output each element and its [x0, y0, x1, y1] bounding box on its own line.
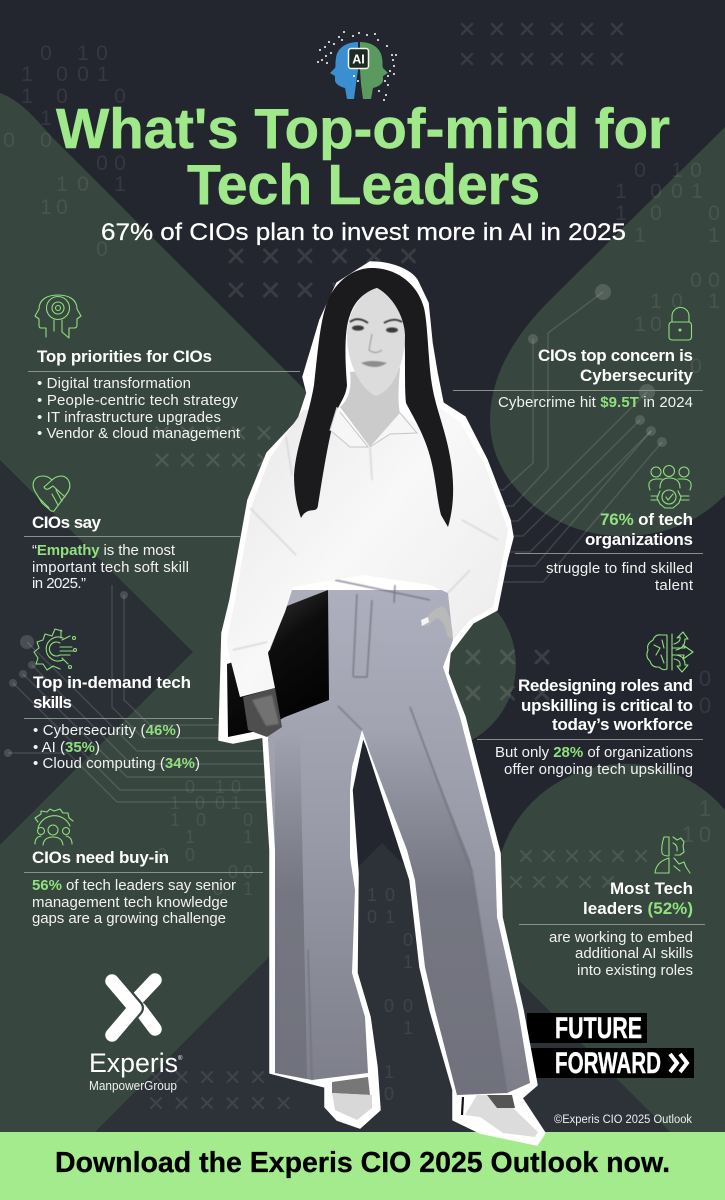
- heading: CIOs need buy-in: [32, 848, 169, 867]
- list: • AI (35%): [33, 739, 100, 756]
- background binary digits: 1: [403, 1018, 413, 1038]
- badge: Future Forward: FUTURE: [555, 1012, 642, 1045]
- body: [495, 744, 693, 778]
- heading: today’s workforce: [552, 715, 693, 734]
- panel: upskilling: [477, 632, 703, 778]
- background binary digits: 1: [699, 796, 711, 821]
- body: [546, 560, 694, 594]
- background binary digits: 10: [634, 313, 662, 336]
- panel: AI skills: [519, 837, 705, 979]
- quote: “Empathy is the most: [32, 542, 176, 559]
- body: into existing roles: [577, 962, 693, 979]
- heading: organizations: [585, 530, 693, 549]
- footer banner: [0, 1132, 725, 1200]
- background binary digits: 10: [682, 822, 711, 847]
- background binary digits: 1: [384, 1062, 394, 1082]
- logo: Experis: Experis: [89, 1048, 178, 1078]
- list: • Digital transformation: [37, 375, 191, 392]
- icon: people under gear: [35, 809, 73, 845]
- list: [33, 722, 200, 772]
- badge: Future Forward: FORWARD: [555, 1047, 661, 1080]
- heading: leaders (52%): [583, 899, 693, 918]
- title: What's Top-of-mind for: [56, 97, 670, 161]
- facial features: [350, 319, 402, 367]
- quote: important tech soft skill: [32, 559, 189, 576]
- background binary digits: 1001: [170, 793, 241, 813]
- panel: top priorities: [28, 295, 300, 442]
- heading: [538, 346, 694, 385]
- badge: Future Forward: [527, 1012, 694, 1080]
- circuit lines: [4, 284, 667, 802]
- background binary digits: 00: [3, 129, 52, 152]
- background binary digits: 00: [384, 996, 413, 1016]
- laptop: [227, 590, 329, 737]
- background binary digits: 1: [40, 107, 52, 130]
- title: Tech Leaders: [187, 153, 540, 217]
- heading: Most Tech: [610, 879, 693, 898]
- shirt: [227, 407, 508, 697]
- background binary digits: 10: [367, 885, 395, 905]
- body: Cybercrime hit $9.5T in 2024: [498, 394, 693, 411]
- person: [219, 262, 545, 1145]
- list: [37, 375, 241, 442]
- background binary digits: 00: [228, 862, 253, 882]
- panel: in-demand skills: [24, 629, 213, 772]
- heading: skills: [33, 693, 72, 712]
- body: [32, 877, 236, 927]
- logo: Experis: ®: [178, 1055, 183, 1062]
- background binary digits: 101: [56, 173, 126, 196]
- background binary digits: 101: [650, 290, 720, 313]
- body: offer ongoing tech upskilling: [504, 761, 693, 778]
- background binary digits: 0: [96, 238, 108, 261]
- heading: Redesigning roles and: [518, 676, 693, 695]
- hands: [243, 688, 282, 737]
- panel: buy-in: [24, 809, 263, 927]
- body: [549, 929, 693, 979]
- heading: 76% of tech: [600, 510, 693, 529]
- body: But only 28% of organizations: [495, 744, 693, 761]
- background binary digits: 0: [699, 666, 711, 691]
- list: • People-centric tech strategy: [37, 392, 238, 409]
- list: • Cloud computing (34%): [33, 755, 200, 772]
- background binary digits: 11: [634, 224, 720, 247]
- background binary digits: 11: [185, 827, 253, 847]
- body: management tech knowledge: [32, 894, 228, 911]
- background binary digits: 100: [21, 85, 126, 108]
- background binary digits: 0: [699, 693, 711, 718]
- collar: [330, 407, 417, 447]
- heading: [33, 673, 191, 712]
- logo: Experis: [89, 980, 183, 1093]
- shoes: [332, 1077, 370, 1095]
- body: talent: [655, 577, 694, 594]
- logo: Experis: ManpowerGroup: [89, 1078, 177, 1093]
- body: are working to embed: [549, 929, 693, 946]
- body: 56% of tech leaders say senior: [32, 877, 236, 894]
- background x patterns: [150, 22, 658, 1111]
- panel: cybersecurity: [453, 308, 703, 411]
- background binary digits: 0: [384, 1084, 394, 1104]
- background binary digits: 00: [157, 845, 195, 865]
- background binary digits: 00: [690, 269, 720, 292]
- list: • Vendor & cloud management: [37, 425, 241, 442]
- body: additional AI skills: [575, 945, 693, 962]
- heading: upskilling is critical to: [521, 696, 693, 715]
- background binary digits: 1: [403, 952, 413, 972]
- background binary digits: 010: [634, 159, 702, 182]
- quote: [32, 542, 189, 592]
- icon: Experis mark: [112, 980, 155, 1035]
- panel: skilled talent: [515, 466, 703, 594]
- background binary digits: 10: [40, 196, 68, 219]
- background binary digits: 010: [185, 777, 241, 797]
- background binary digits: 100: [615, 202, 720, 225]
- icon: AI two heads: [317, 31, 397, 101]
- background binary digits: 1001: [21, 63, 109, 86]
- heading: Top priorities for CIOs: [37, 347, 212, 366]
- neck: [340, 368, 400, 447]
- icon: half heads and gear: [655, 837, 690, 873]
- background binary digits: 100: [170, 810, 253, 830]
- background binary digits: 010: [40, 42, 108, 65]
- icon: handshake heart: [33, 476, 70, 511]
- subtitle: 67% of CIOs plan to invest more in AI in 2025: [101, 219, 626, 246]
- body: gaps are a growing challenge: [32, 910, 226, 927]
- icon: brain with arrows: [647, 632, 693, 672]
- heading: CIOs top concern is: [538, 346, 693, 365]
- icon: heads with gear: [35, 295, 81, 338]
- panel: CIOs say: [24, 476, 240, 592]
- icon: team with gear: [649, 466, 691, 508]
- heading: Cybersecurity: [580, 366, 694, 385]
- background binary digits: 00: [96, 152, 126, 175]
- hair: [294, 268, 453, 527]
- background binary digits: 0: [690, 355, 702, 378]
- icon: lock: [669, 308, 692, 340]
- list: • Cybersecurity (46%): [33, 722, 181, 739]
- face: [347, 288, 405, 396]
- background binary digits: 01: [367, 907, 395, 927]
- background binary digits: 0: [403, 930, 413, 950]
- quote: in 2025.”: [32, 575, 86, 592]
- list: • IT infrastructure upgrades: [37, 409, 221, 426]
- heading: [585, 510, 693, 549]
- heading: Top in-demand tech: [33, 673, 191, 692]
- heading: CIOs say: [32, 513, 102, 532]
- body: struggle to find skilled: [546, 560, 693, 577]
- background binary digits: 1001: [615, 180, 703, 203]
- source note: ©Experis CIO 2025 Outlook: [554, 1114, 692, 1126]
- footer banner: Download the Experis CIO 2025 Outlook now.: [55, 1147, 670, 1179]
- heading: [518, 676, 693, 734]
- heading: [583, 879, 693, 918]
- icon: gear circuit: [34, 629, 76, 670]
- icon: AI two heads: AI: [352, 52, 365, 66]
- background binary digits: 01: [213, 879, 253, 899]
- title: [56, 97, 670, 217]
